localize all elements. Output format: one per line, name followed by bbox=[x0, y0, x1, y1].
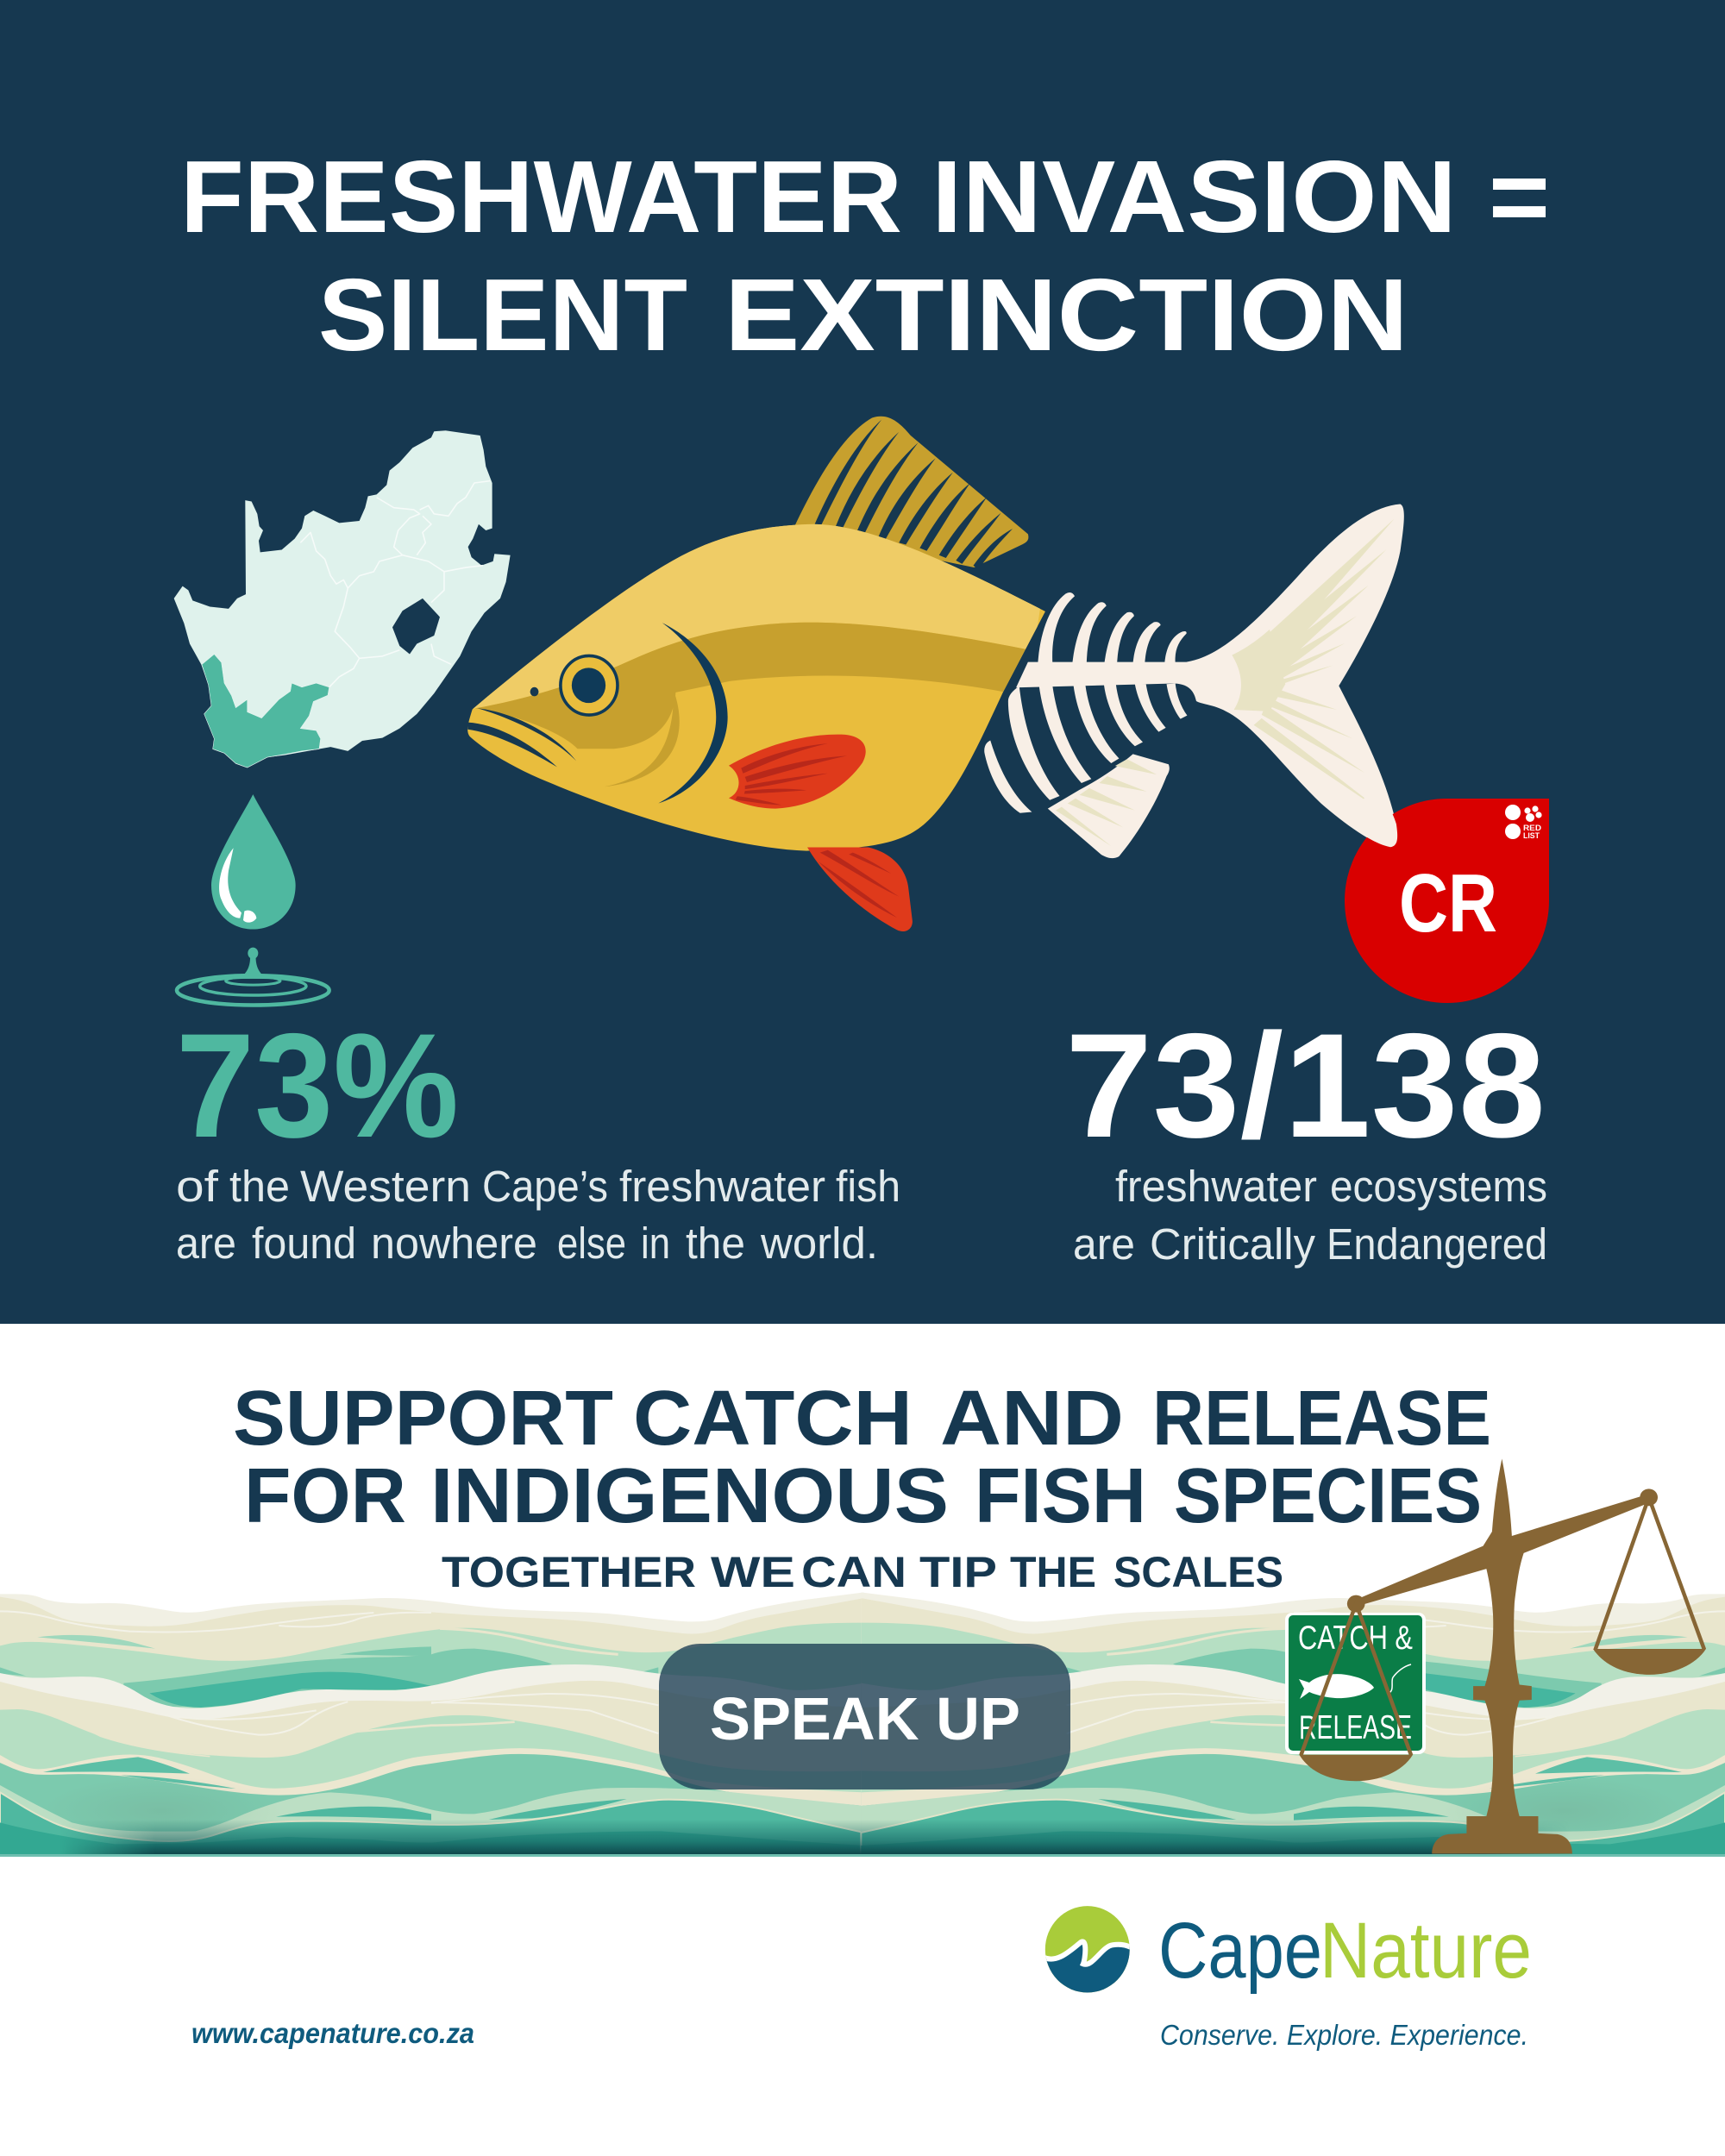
title bbox=[180, 140, 1550, 373]
text block: Western Cape fish: freshwater bbox=[619, 1162, 825, 1211]
icon: fish on sign bbox=[1299, 1674, 1374, 1699]
text block: Western Cape fish: Cape’s bbox=[482, 1162, 608, 1211]
subheading: SCALES bbox=[1113, 1548, 1283, 1596]
text block: Western Cape fish: fish bbox=[836, 1162, 900, 1211]
map: South Africa with Western Cape highlighted bbox=[174, 430, 511, 768]
text block: critically endangered ecosystems: ecosystems bbox=[1330, 1162, 1547, 1211]
text block: Western Cape fish: in bbox=[641, 1219, 670, 1268]
subheading: TOGETHER bbox=[442, 1548, 696, 1596]
heading: support catch and release: FOR bbox=[244, 1453, 406, 1539]
text block: Western Cape fish: of bbox=[176, 1162, 219, 1211]
heading: support catch and release: CATCH bbox=[633, 1376, 913, 1462]
skeleton ribs and tail bbox=[984, 505, 1404, 858]
wordmark: Nature: Nature bbox=[1320, 1907, 1532, 1995]
logo: CapeNature bbox=[1043, 1906, 1532, 2051]
text block: critically endangered ecosystems: Endangered bbox=[1327, 1219, 1547, 1269]
icon: CapeNature emblem bbox=[1045, 1906, 1130, 1992]
text block: critically endangered ecosystems: freshwater bbox=[1115, 1162, 1317, 1211]
badge: IUCN Critically Endangered bbox=[1345, 783, 1549, 1003]
text block: Western Cape fish: the bbox=[229, 1162, 290, 1211]
subheading: TIP bbox=[919, 1548, 997, 1596]
sign: catch and release bbox=[1285, 1613, 1426, 1754]
tail tip over badge bbox=[1345, 783, 1397, 847]
title: SILENT bbox=[318, 258, 687, 373]
stat: 73 of 138: 73/138 bbox=[1065, 1003, 1546, 1169]
text block: Western Cape fish: nowhere bbox=[371, 1219, 537, 1268]
heading: support catch and release: INDIGENOUS bbox=[430, 1453, 949, 1539]
heading: support catch and release: RELEASE bbox=[1152, 1376, 1491, 1462]
subheading bbox=[442, 1548, 1283, 1596]
button: speak up bbox=[659, 1644, 1070, 1789]
text block: Western Cape fish: are bbox=[176, 1219, 236, 1268]
subheading: WE bbox=[711, 1548, 795, 1596]
icon: red list logo: LIST bbox=[1523, 831, 1540, 841]
heading: support catch and release bbox=[233, 1376, 1491, 1539]
title: FRESHWATER bbox=[180, 140, 902, 254]
icon: water drop with ripples bbox=[177, 794, 329, 1006]
text block: Western Cape fish: else bbox=[557, 1219, 626, 1268]
text block: Western Cape fish bbox=[176, 1162, 900, 1268]
subheading: CAN bbox=[801, 1548, 906, 1596]
stat: 73 percent: 73% bbox=[176, 1003, 459, 1169]
body bbox=[467, 524, 1045, 931]
text block: critically endangered ecosystems: Critically bbox=[1150, 1219, 1315, 1269]
illustration: half fish half skeleton bbox=[448, 397, 1404, 931]
panel: white lower background bbox=[0, 1324, 1725, 2156]
text block: Western Cape fish: world. bbox=[760, 1219, 878, 1268]
text block: critically endangered ecosystems: are bbox=[1073, 1219, 1135, 1269]
heading: support catch and release: AND bbox=[940, 1376, 1124, 1462]
dorsal fin bbox=[794, 417, 1028, 569]
waves background bbox=[0, 1593, 1725, 1867]
badge: IUCN Critically Endangered: CR bbox=[1399, 857, 1497, 950]
website url: www.capenature.co.za bbox=[191, 2017, 474, 2049]
text block: critically endangered ecosystems bbox=[1073, 1162, 1547, 1269]
heading: support catch and release: SPECIES bbox=[1174, 1453, 1482, 1539]
wordmark: Cape: Cape bbox=[1158, 1907, 1322, 1995]
heading: support catch and release: SUPPORT bbox=[233, 1376, 613, 1462]
title: = bbox=[1489, 140, 1550, 254]
tagline: Conserve. Explore. Experience. bbox=[1160, 2019, 1528, 2051]
text block: Western Cape fish: Western bbox=[300, 1162, 471, 1211]
text block: Western Cape fish: found bbox=[252, 1219, 356, 1268]
heading: support catch and release: FISH bbox=[975, 1453, 1146, 1539]
icon: red list logo: RED bbox=[1523, 824, 1541, 833]
button: speak up: SPEAK UP bbox=[710, 1685, 1020, 1752]
icon: balance scale bbox=[1299, 1459, 1706, 1853]
sign: catch and release: CATCH & bbox=[1298, 1620, 1413, 1657]
panel: navy top background bbox=[0, 0, 1725, 1324]
sign: catch and release: RELEASE bbox=[1299, 1709, 1412, 1746]
subheading: THE bbox=[1010, 1548, 1096, 1596]
title: INVASION bbox=[932, 140, 1457, 254]
icon: red list logo bbox=[1505, 805, 1542, 841]
text block: Western Cape fish: the bbox=[686, 1219, 745, 1268]
title: EXTINCTION bbox=[724, 258, 1408, 373]
